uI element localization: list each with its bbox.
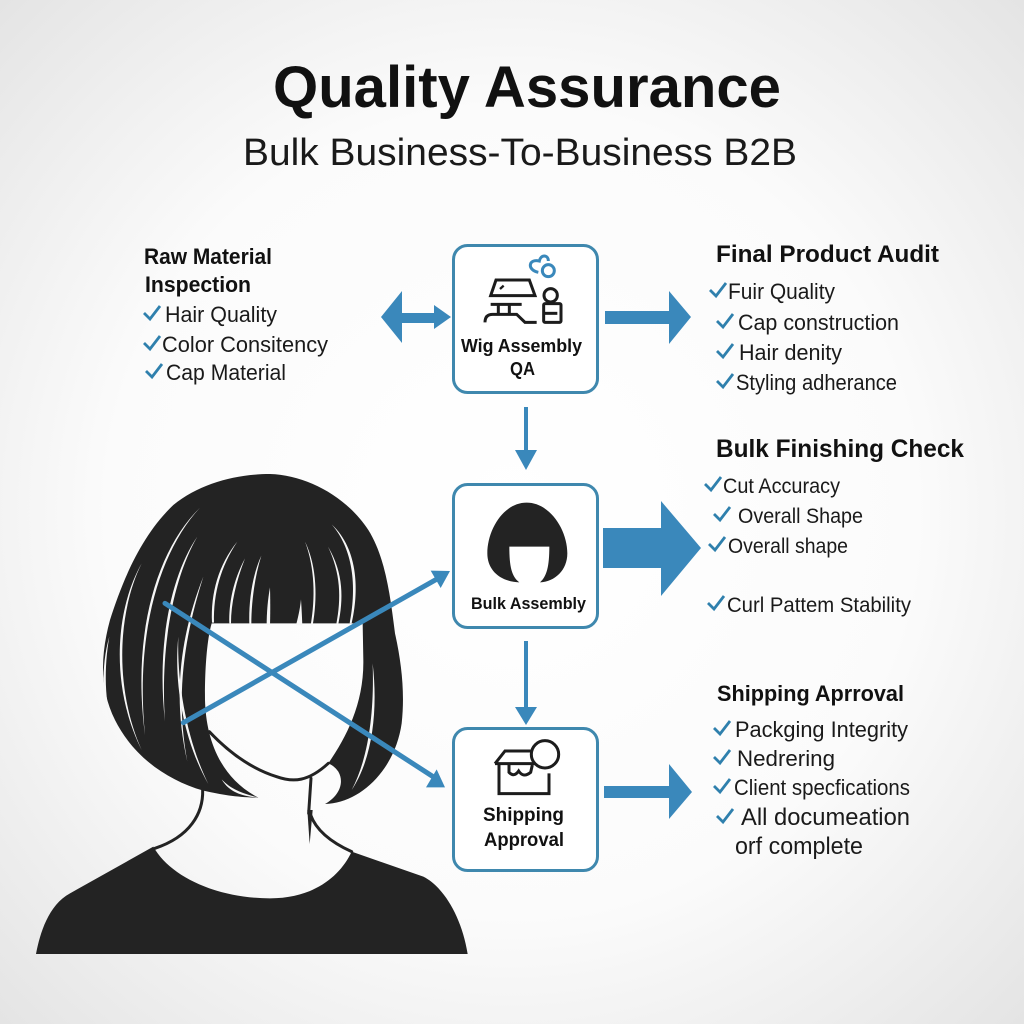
heading: Final Product Audit (716, 241, 939, 268)
list: raw material inspection (144, 244, 328, 385)
hair strands (104, 508, 375, 798)
heading line 2: Inspection (145, 272, 251, 297)
item: overall shape: Overall Shape (738, 505, 863, 528)
label line 2: Approval (484, 830, 564, 851)
item: curl pattern stability: Curl Pattem Stability (727, 594, 911, 617)
item: hair quality: Hair Quality (165, 302, 277, 327)
panel: wig assembly QA (454, 246, 598, 392)
item: all documentation complete: orf complete (735, 833, 863, 860)
subtitle: Bulk Business-To-Business B2B (243, 132, 797, 174)
flow arrow: bulk assembly to finishing check (603, 501, 701, 596)
torso (36, 847, 468, 954)
list: final product audit (710, 241, 939, 395)
item: cap construction: Cap construction (738, 310, 899, 335)
illustration: faceless person with bob wig (36, 474, 468, 954)
list: shipping approval (714, 681, 910, 860)
item: cap material: Cap Material (166, 360, 286, 385)
flow arrow: wig assembly to final audit (605, 291, 691, 344)
panel: shipping approval (454, 728, 598, 870)
item: packaging integrity: Packging Integrity (735, 717, 908, 742)
crossed arrows over face (165, 571, 450, 787)
flow arrow: double arrow raw material to wig assembly (381, 291, 451, 343)
neck and jaw lines (155, 732, 352, 852)
item: cut accuracy: Cut Accuracy (723, 475, 840, 498)
item: color consistency: Color Consitency (162, 332, 328, 357)
heading: Bulk Finishing Check (716, 435, 964, 463)
item: styling adherance: Styling adherance (736, 370, 897, 395)
item: all documentation complete (717, 804, 910, 860)
item: nedrering: Nedrering (737, 746, 835, 771)
item: fuir quality: Fuir Quality (728, 279, 835, 304)
heading: Shipping Aprroval (717, 681, 904, 706)
panel: bulk assembly (454, 484, 598, 628)
label: Wig Assembly (461, 336, 582, 356)
icon: store with circle (495, 741, 559, 794)
label line 2: QA (510, 359, 535, 379)
title: Quality Assurance (273, 55, 781, 120)
heading: Raw Material (144, 244, 272, 269)
label: Shipping (483, 805, 564, 826)
icon: workstation and worker (485, 256, 561, 322)
list: bulk finishing check (705, 435, 964, 617)
item: overall shape lower case: Overall shape (728, 535, 848, 558)
flow arrow: bulk assembly down to shipping (515, 641, 537, 725)
item: hair denity: Hair denity (739, 340, 842, 365)
flow arrow: wig assembly down to bulk assembly (515, 407, 537, 470)
label: Bulk Assembly (471, 594, 587, 613)
item: client specifications: Client specfications (734, 775, 910, 800)
flow arrow: shipping to shipping approval list (604, 764, 692, 819)
hair (103, 474, 403, 804)
item: all documentation complete: All documeation (741, 804, 910, 831)
icon: wig (487, 503, 567, 582)
